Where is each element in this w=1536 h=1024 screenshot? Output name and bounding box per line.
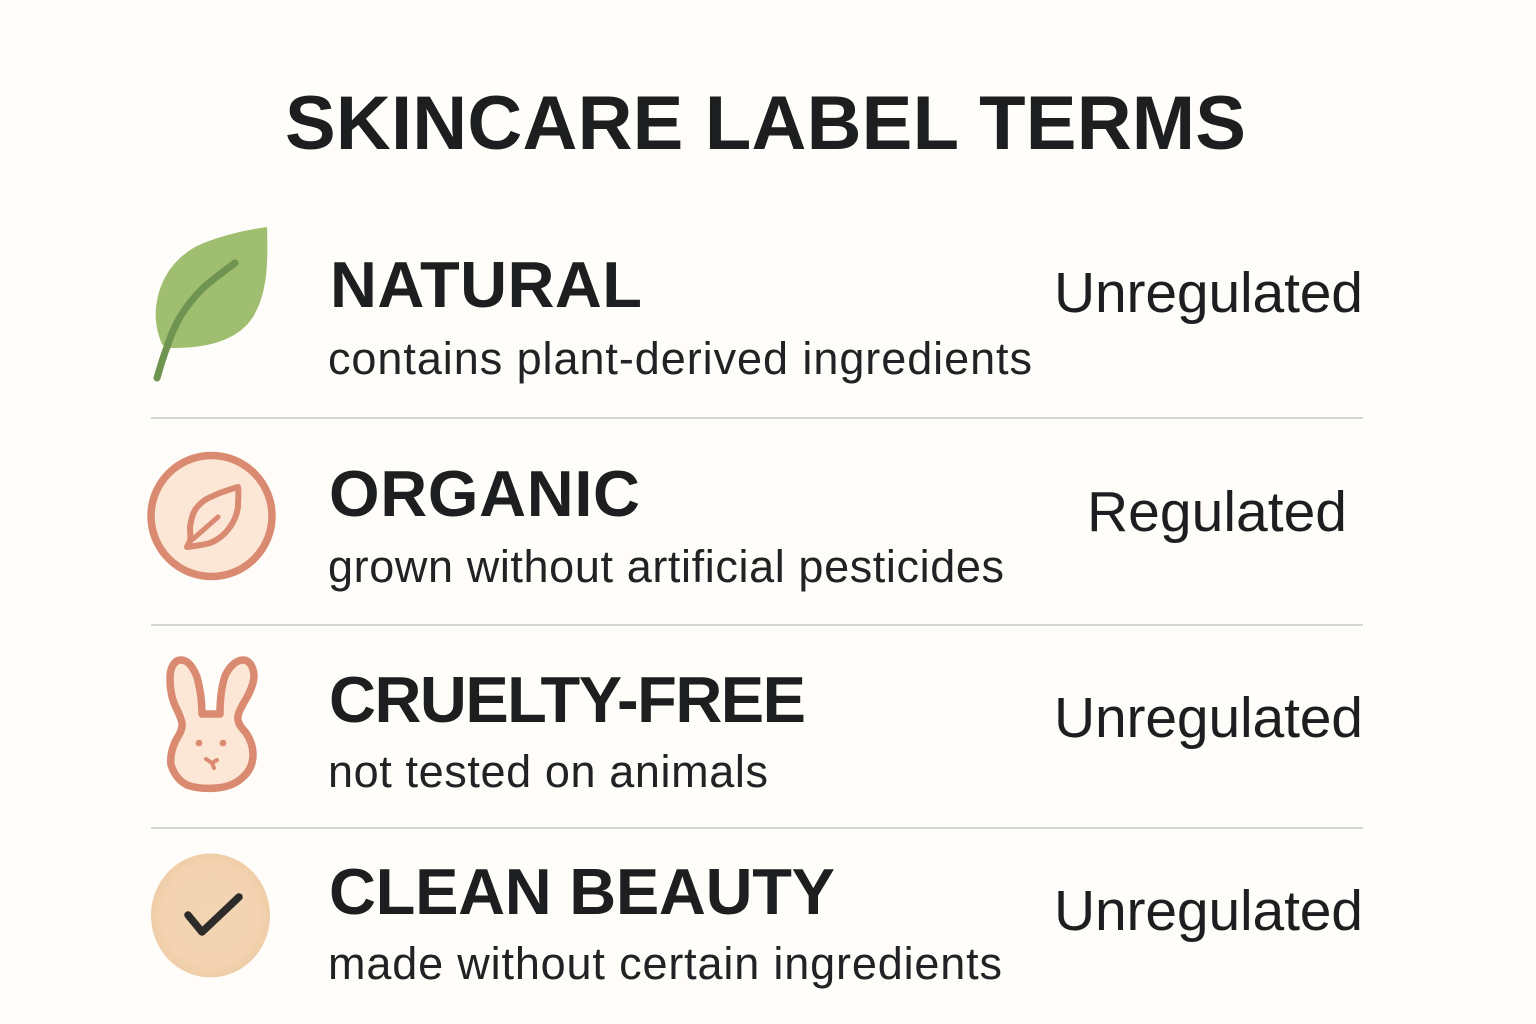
title: SKINCARE LABEL TERMS xyxy=(285,81,1246,166)
row: clean beauty xyxy=(151,854,1363,989)
status: natural: Unregulated xyxy=(1054,261,1363,325)
icon: rabbit xyxy=(170,660,254,788)
description: natural: contains plant-derived ingredients xyxy=(328,333,1032,384)
heading: cruelty-free: CRUELTY-FREE xyxy=(329,663,806,736)
row: cruelty-free xyxy=(170,660,1363,797)
status: cruelty-free: Unregulated xyxy=(1054,686,1363,750)
description: clean beauty: made without certain ingredients xyxy=(328,938,1002,989)
description: cruelty-free: not tested on animals xyxy=(328,746,768,797)
icon: leaf in circle xyxy=(151,456,272,576)
status: organic: Regulated xyxy=(1087,480,1347,544)
status: clean beauty: Unregulated xyxy=(1054,879,1363,943)
heading: organic: ORGANIC xyxy=(329,457,640,530)
row: organic xyxy=(151,456,1347,592)
icon: green leaf xyxy=(156,227,267,378)
description: organic: grown without artificial pesticides xyxy=(328,541,1004,592)
icon: check badge xyxy=(151,854,270,978)
heading: clean beauty: CLEAN BEAUTY xyxy=(329,855,835,928)
heading: natural: NATURAL xyxy=(330,248,642,321)
row: natural xyxy=(156,227,1363,384)
